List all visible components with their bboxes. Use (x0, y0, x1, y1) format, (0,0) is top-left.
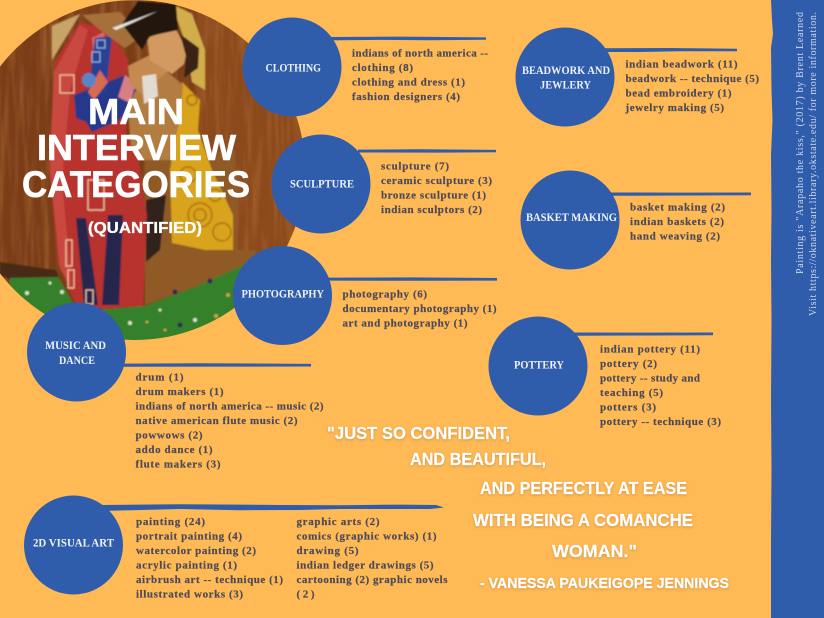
list (342, 288, 497, 330)
brush line (603, 48, 737, 52)
credit text (795, 12, 819, 316)
list: drum (1) (136, 372, 184, 384)
list: indian pottery (11) (600, 344, 700, 356)
list: fashion designers (4) (352, 91, 460, 103)
list: photography (6) (342, 288, 427, 300)
list: indian beadwork (11) (626, 58, 738, 70)
list: right column (296, 516, 448, 600)
list: native american flute music (2) (136, 415, 298, 427)
list: beadwork -- technique (5) (626, 73, 759, 85)
label (522, 65, 610, 92)
circle (520, 170, 620, 270)
dark band above grass (0, 262, 60, 280)
circle (24, 496, 123, 594)
list: left column: watercolor painting (2) (136, 545, 256, 557)
list: powwows (2) (136, 430, 203, 442)
list (600, 344, 721, 428)
quote: AND PERFECTLY AT EASE (480, 478, 687, 498)
list: hand weaving (2) (630, 230, 720, 242)
list (352, 48, 488, 103)
label: 2D VISUAL ART (33, 538, 114, 550)
list: addo dance (1) (136, 444, 213, 456)
list: pottery (2) (600, 358, 657, 370)
quote: AND BEAUTIFUL, (410, 449, 546, 469)
list: indians of north america -- (352, 48, 488, 60)
list: indian sculptors (2) (381, 204, 482, 216)
list: left column: airbrush art -- technique (1) (136, 574, 283, 586)
list: pottery -- study and (600, 372, 700, 384)
panel: music and dance (27, 302, 324, 470)
list: left column: portrait painting (4) (136, 530, 242, 542)
subtitle: (QUANTIFIED) (88, 220, 202, 237)
label: POTTERY (514, 360, 565, 372)
list (381, 160, 492, 216)
list: pottery -- technique (3) (600, 416, 721, 428)
credit text: Visit https://oknativeart.library.okstate.edu/ for more information. (808, 12, 819, 316)
circle (488, 316, 588, 416)
quote: WITH BEING A COMANCHE (473, 510, 693, 530)
circle (272, 134, 370, 234)
list: ceramic sculpture (3) (381, 175, 492, 187)
credit sidebar (771, 0, 824, 618)
label: JEWLERY (540, 80, 592, 92)
list: left column: illustrated works (3) (136, 588, 243, 600)
title: MAIN (88, 91, 184, 132)
label: PHOTOGRAPHY (242, 288, 325, 300)
list: teaching (5) (600, 387, 663, 399)
panel: basket making (520, 170, 751, 270)
list: basket making (2) (630, 202, 725, 214)
label: MUSIC AND (45, 340, 106, 352)
list: left column: acrylic painting (1) (136, 560, 237, 572)
brush line (328, 277, 497, 281)
panel: pottery (488, 316, 721, 428)
mid body skin (127, 70, 183, 160)
title (22, 91, 250, 205)
panel: photography (233, 246, 497, 345)
credit text: Painting is "Arapaho the kiss," (2017) by Brent Learned (795, 12, 806, 274)
list: jewelry making (5) (624, 102, 724, 114)
label (45, 340, 106, 367)
circle (516, 28, 614, 126)
list (624, 58, 759, 114)
list: bronze sculpture (1) (381, 190, 486, 202)
list: indians of north america -- music (2) (136, 400, 324, 412)
brush line (358, 149, 496, 153)
dark hair and feather (122, 1, 178, 50)
brush line (330, 37, 486, 40)
quote: "JUST SO CONFIDENT, (327, 423, 510, 443)
list: right column: indian ledger drawings (5) (296, 560, 434, 572)
list: potters (3) (600, 402, 656, 414)
list: left column (136, 516, 283, 600)
list: left column: painting (24) (136, 516, 205, 528)
list: right column: cartooning (2) graphic novels (296, 574, 448, 586)
list: bead embroidery (1) (626, 88, 732, 100)
brush line (573, 332, 713, 336)
label: BASKET MAKING (526, 212, 617, 224)
label: BEADWORK AND (522, 65, 610, 77)
title: CATEGORIES (22, 164, 250, 205)
quote attribution: - VANESSA PAUKEIGOPE JENNINGS (480, 575, 729, 592)
list: right column: graphic arts (2) (296, 516, 380, 528)
kneeling brown lower figure (145, 150, 256, 305)
list: art and photography (1) (342, 318, 468, 330)
list (136, 372, 324, 470)
circle (242, 18, 342, 116)
quote (327, 423, 729, 592)
red robe (49, 22, 147, 310)
list (630, 202, 725, 242)
list: right column: (2) (296, 588, 315, 600)
label: CLOTHING (266, 62, 321, 74)
title: INTERVIEW (37, 127, 236, 168)
list: right column: comics (graphic works) (1) (296, 530, 437, 542)
arms and skin (127, 55, 168, 94)
list: clothing (8) (352, 62, 413, 74)
circle (27, 302, 126, 402)
quote: WOMAN." (552, 541, 637, 561)
green grass (8, 264, 244, 340)
painting: Arapaho the Kiss (0, 0, 310, 345)
panel: clothing (242, 18, 488, 116)
brush line (123, 363, 311, 367)
panel: beadwork and jewelry (516, 28, 759, 126)
brush line (100, 504, 444, 511)
panel: 2D visual art (24, 496, 448, 600)
list: sculpture (7) (381, 160, 449, 172)
beige arch behind figures (52, 14, 80, 60)
circle (233, 246, 332, 345)
list: indian baskets (2) (630, 216, 724, 228)
panel: sculpture (272, 134, 496, 234)
list: right column: drawing (5) (296, 545, 359, 557)
label: SCULPTURE (290, 178, 354, 190)
brush line (611, 192, 751, 196)
list: documentary photography (1) (342, 303, 497, 315)
label: DANCE (59, 355, 95, 367)
yellow robe (170, 82, 233, 250)
list: drum makers (1) (136, 386, 224, 398)
list: flute makers (3) (136, 458, 221, 470)
list: clothing and dress (1) (352, 76, 465, 88)
sidebar background (771, 0, 824, 618)
